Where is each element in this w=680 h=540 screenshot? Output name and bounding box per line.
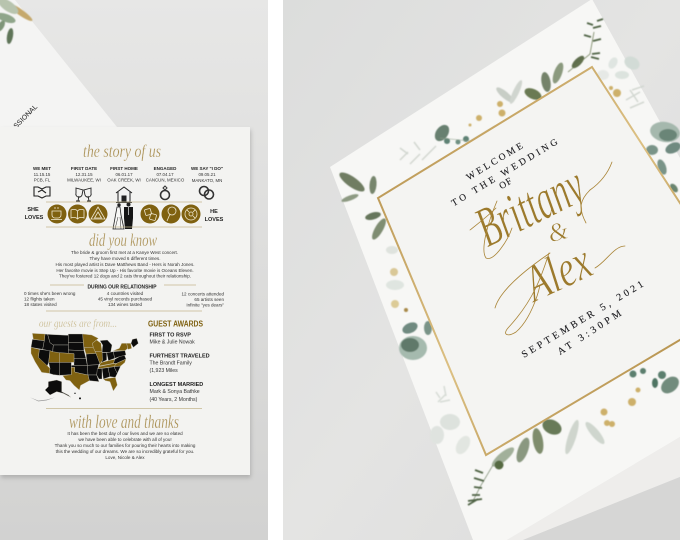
milestone: we met: 11.15.15 bbox=[34, 172, 51, 177]
label: she loves bbox=[25, 207, 44, 221]
foliage: top edge leaves bbox=[432, 19, 603, 144]
award: furthest traveled: FURTHEST TRAVELED bbox=[150, 354, 210, 360]
heading: during our relationship: DURING OUR RELATIONSHIP bbox=[88, 284, 157, 290]
milestone: first date: FIRST DATE bbox=[71, 166, 97, 171]
icon: house bbox=[116, 187, 132, 202]
text block: did you know facts: Her favorite movie is Step Up - His favorite movie is Oceans Eleven. bbox=[56, 268, 194, 273]
award: furthest traveled: (1,923 Miles bbox=[150, 368, 178, 374]
stats: right column: Infinite "yes dears" bbox=[186, 302, 224, 308]
timeline: five milestones bbox=[33, 166, 223, 183]
milestone: first date: MILWAUKEE, WI bbox=[67, 178, 101, 182]
label: he loves: LOVES bbox=[205, 217, 224, 223]
award: longest married: (40 Years, 2 Months) bbox=[150, 397, 198, 403]
milestone: we met: PCB, FL bbox=[34, 178, 51, 182]
stats: right column: 65 artists seen bbox=[194, 297, 224, 302]
stats: right column bbox=[182, 292, 224, 308]
stats: middle column: 4 countries visited bbox=[107, 291, 144, 296]
stats: middle column: 45 vinyl records purchased bbox=[98, 296, 153, 302]
ampersand: & bbox=[545, 215, 572, 248]
name: Brittany: Brittany bbox=[466, 154, 594, 260]
stats: left column: 12 flights taken bbox=[24, 296, 55, 302]
text block: closing message: Love, Nicole & Alex bbox=[105, 455, 145, 460]
text block: did you know facts: The bride & groom first met at a Kanye West concert. bbox=[71, 250, 178, 255]
milestone: we say i do: WE SAY "I DO" bbox=[191, 166, 223, 171]
stats: left column: 18 states visited bbox=[24, 302, 57, 307]
heading: did you know: did you know bbox=[89, 230, 157, 250]
milestone: we say i do: MANKATO, MN bbox=[192, 178, 222, 183]
milestone: first date bbox=[67, 166, 101, 182]
panel: inner pages of program booklet bbox=[507, 437, 680, 540]
icon: wedding rings bbox=[200, 186, 214, 199]
icon row: she loves circles bbox=[48, 204, 108, 224]
gold foil frame bbox=[378, 67, 680, 455]
label: he loves: HE bbox=[210, 209, 218, 215]
award: first to rsvp: FIRST TO RSVP bbox=[150, 332, 191, 338]
foliage: right edge leaves bbox=[597, 54, 680, 194]
text block: closing message: It has been the best day of our lives and we are so elated bbox=[67, 431, 183, 436]
date and time: AT 3:30PM bbox=[556, 308, 624, 358]
award: longest married: Mark & Sonya Bathke bbox=[150, 389, 200, 395]
award: longest married: LONGEST MARRIED bbox=[150, 382, 203, 388]
milestone: we met bbox=[33, 166, 51, 182]
grey sprigs bbox=[400, 86, 644, 164]
icon: handshake bbox=[34, 187, 50, 198]
heading: with love and thanks: with love and thanks bbox=[69, 412, 179, 433]
label: she loves: SHE bbox=[27, 207, 39, 213]
date and time: SEPTEMBER 5, 2021 bbox=[520, 279, 646, 361]
foliage: lower right leaves bbox=[630, 368, 680, 397]
icon row: he loves circles bbox=[140, 204, 200, 224]
text block: did you know facts: His most played artist is Dave Matthews Band - Hers is Norah Jones. bbox=[56, 262, 194, 267]
stats: left column: 0 times she's been wrong bbox=[24, 291, 76, 296]
milestone: first date: 12.31.15 bbox=[75, 172, 93, 177]
heading: guest awards: GUEST AWARDS bbox=[148, 320, 204, 328]
text block: closing message: Thank you so much to our families for pouring their hearts into making bbox=[55, 443, 196, 448]
icon: champagne glasses bbox=[76, 188, 91, 201]
calligraphy flourishes bbox=[470, 162, 625, 335]
panel: right photo background bbox=[283, 0, 680, 540]
stats: middle column bbox=[98, 291, 153, 307]
milestone: we met: WE MET bbox=[33, 166, 51, 171]
heading: our guests are from: our guests are from... bbox=[39, 316, 117, 330]
heading: welcome to the wedding of: WELCOME bbox=[465, 141, 525, 183]
heading: welcome to the wedding of: TO THE WEDDING bbox=[450, 138, 560, 209]
milestone: first home: FIRST HOME bbox=[110, 166, 138, 171]
heading: the story of us: the story of us bbox=[83, 141, 161, 161]
award: longest married bbox=[150, 382, 203, 403]
panel: left photo background bbox=[0, 0, 268, 540]
panel: back card with corner foliage bbox=[0, 0, 117, 130]
icon: ring bbox=[160, 186, 170, 200]
stats: middle column: 134 wines tasted bbox=[108, 302, 143, 307]
label: he loves bbox=[205, 209, 224, 223]
name: Alex: Alex bbox=[512, 231, 600, 314]
foliage: lower left pale leaves bbox=[386, 280, 473, 457]
text block: closing message bbox=[55, 431, 196, 460]
gold splatter bbox=[468, 86, 640, 427]
milestone: engaged: 07.04.17 bbox=[156, 172, 174, 177]
icon: couple bride and groom bbox=[113, 202, 133, 229]
panel: story of us card bbox=[0, 127, 251, 478]
award: first to rsvp bbox=[150, 332, 195, 346]
milestone: we say i do bbox=[191, 166, 223, 183]
milestone: we say i do: 09.05.21 bbox=[198, 172, 216, 177]
heading: welcome to the wedding of: OF bbox=[498, 177, 514, 192]
milestone: engaged bbox=[146, 166, 185, 182]
award: first to rsvp: Mike & Julie Nowak bbox=[150, 340, 195, 346]
stats: right column: 12 concerts attended bbox=[182, 292, 224, 296]
milestone: engaged: ENGAGED bbox=[154, 166, 177, 171]
couple names in gold calligraphy bbox=[466, 154, 625, 335]
foliage: cover leaves and gold splatter bbox=[337, 19, 680, 505]
back card text: SSIONAL bbox=[13, 104, 39, 130]
white gutter between photos bbox=[268, 0, 283, 540]
milestone: engaged: CANCUN, MEXICO bbox=[146, 178, 185, 182]
award: furthest traveled: The Brandt Family bbox=[150, 360, 192, 366]
text block: closing message: this the wedding of our dreams. We are so incredibly grateful for you. bbox=[56, 449, 194, 454]
milestone: first home: OAK CREEK, WI bbox=[107, 178, 141, 182]
panel: program cover card bbox=[330, 0, 680, 540]
map: United States states visited bbox=[30, 333, 138, 401]
milestone: first home bbox=[107, 166, 141, 182]
text block: did you know facts: They have moved 6 different times. bbox=[90, 256, 160, 261]
text block: did you know facts: They've fostered 12 dogs and 2 cats throughout their relationship. bbox=[59, 274, 191, 278]
text block: closing message: we have been able to celebrate with all of you! bbox=[78, 437, 172, 442]
foliage: bottom edge leaves bbox=[468, 416, 607, 505]
foliage: left edge leaves bbox=[337, 169, 398, 276]
stats: left column bbox=[24, 291, 76, 307]
milestone: first home: 06.01.17 bbox=[115, 172, 133, 177]
text block: did you know facts bbox=[56, 250, 194, 278]
award: furthest traveled bbox=[150, 354, 210, 374]
label: she loves: LOVES bbox=[25, 215, 44, 221]
